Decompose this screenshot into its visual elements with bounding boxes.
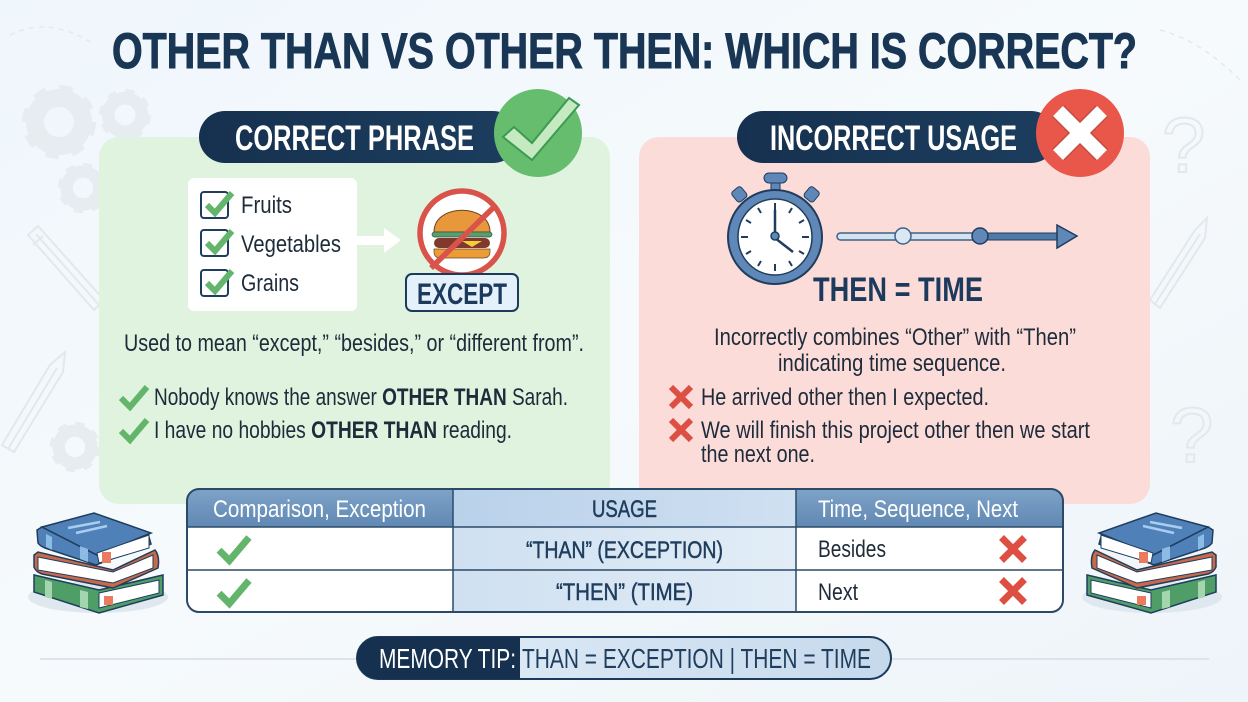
table row 2 (219, 579, 1025, 606)
checklist card: Grains (241, 270, 299, 297)
arrow: white (357, 228, 401, 253)
description text: Incorrectly combines “Other” with “Then” (714, 324, 1076, 351)
table row 2: “THEN” (TIME) (556, 579, 693, 606)
icon: green check badge (494, 89, 582, 177)
example 2: the next one. (701, 441, 815, 468)
table header (213, 496, 1018, 523)
heading: correct phrase (199, 111, 519, 163)
icon: stopwatch (728, 173, 822, 284)
description text: indicating time sequence. (778, 350, 1006, 377)
decorative background icons: ? (1162, 101, 1205, 189)
comparison table (187, 489, 1063, 612)
heading: correct phrase: CORRECT PHRASE (235, 119, 474, 158)
checklist card: Fruits (241, 192, 292, 219)
example 2 (671, 417, 1090, 468)
checklist card (188, 178, 357, 311)
example 1: Nobody knows the answer OTHER THAN Sarah. (154, 384, 568, 411)
decorative background icons: ? (1170, 391, 1213, 479)
definition text: Used to mean “except,” “besides,” or “different from”. (124, 330, 584, 357)
arrow: timeline (837, 225, 1077, 248)
table header: Time, Sequence, Next (818, 496, 1018, 523)
memory tip: MEMORY TIP: (379, 643, 516, 674)
icon: books left (28, 513, 168, 613)
table row 1 (219, 536, 1025, 564)
table header: Comparison, Exception (213, 496, 426, 523)
panel: correct phrase (99, 89, 610, 504)
memory tip: THAN = EXCEPTION | THEN = TIME (522, 643, 871, 674)
label: then = time: THEN = TIME (813, 271, 983, 309)
example 2: We will finish this project other then we start (701, 417, 1090, 444)
icon: red x badge (1036, 89, 1124, 177)
label: except (406, 274, 518, 311)
table row 1: “THAN” (EXCEPTION) (526, 537, 723, 564)
label: except: EXCEPT (417, 278, 507, 311)
table row 1: Besides (818, 536, 886, 563)
memory tip (357, 637, 891, 679)
icon: books right (1082, 513, 1222, 613)
table header: USAGE (592, 496, 657, 523)
icon: no burger (420, 191, 504, 275)
table row 2: Next (818, 579, 858, 606)
heading: incorrect usage (737, 111, 1057, 163)
panel: incorrect usage (639, 89, 1150, 504)
example 2: I have no hobbies OTHER THAN reading. (154, 417, 512, 444)
checklist card: Vegetables (241, 231, 341, 258)
description text (714, 324, 1076, 377)
heading: incorrect usage: INCORRECT USAGE (770, 119, 1017, 158)
example 1: He arrived other then I expected. (701, 384, 989, 411)
